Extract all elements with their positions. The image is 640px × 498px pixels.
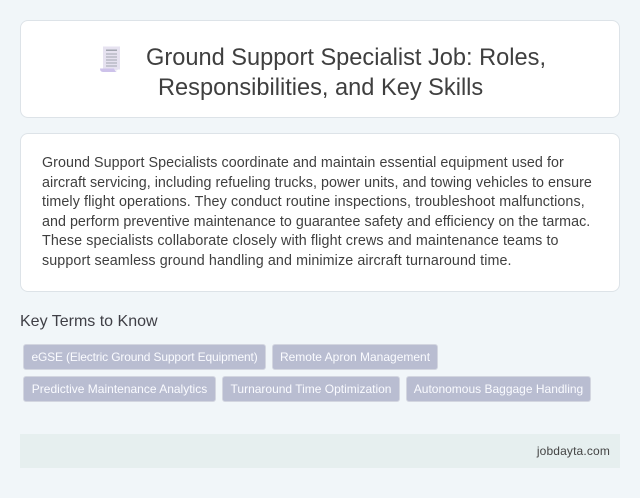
tag: Remote Apron Management — [280, 350, 430, 364]
heading: Ground Support Specialist Job: Roles, — [146, 45, 546, 71]
tag — [222, 376, 400, 402]
heading: Responsibilities, and Key Skills — [158, 75, 483, 101]
title panel — [20, 20, 620, 118]
footer bar — [20, 434, 620, 468]
tag: Predictive Maintenance Analytics — [32, 382, 207, 396]
tag: Turnaround Time Optimization — [231, 382, 391, 396]
footer source: jobdayta.com — [537, 444, 610, 458]
description text: and perform preventive maintenance to guarantee safety and efficiency on the tarmac. — [42, 214, 590, 230]
heading — [146, 45, 546, 101]
key terms heading: Key Terms to Know — [20, 313, 158, 330]
description text — [42, 155, 592, 269]
icon: document — [100, 46, 120, 72]
description text: aircraft servicing, including refueling trucks, power units, and towing vehicles to ensure — [42, 175, 592, 191]
description text: Ground Support Specialists coordinate and maintain essential equipment used for — [42, 155, 564, 171]
description text: These specialists collaborate closely with flight crews and maintenance teams to — [42, 233, 559, 249]
tag — [23, 376, 216, 402]
description panel — [20, 133, 620, 292]
description text: timely flight operations. They conduct routine inspections, troubleshoot malfunctions, — [42, 194, 585, 210]
tag — [406, 376, 591, 402]
tag — [23, 344, 266, 370]
tag: Autonomous Baggage Handling — [414, 382, 583, 396]
description text: support seamless ground handling and minimize aircraft turnaround time. — [42, 253, 512, 269]
tag: eGSE (Electric Ground Support Equipment) — [31, 350, 258, 364]
tag — [272, 344, 438, 370]
key terms tags — [23, 344, 591, 402]
